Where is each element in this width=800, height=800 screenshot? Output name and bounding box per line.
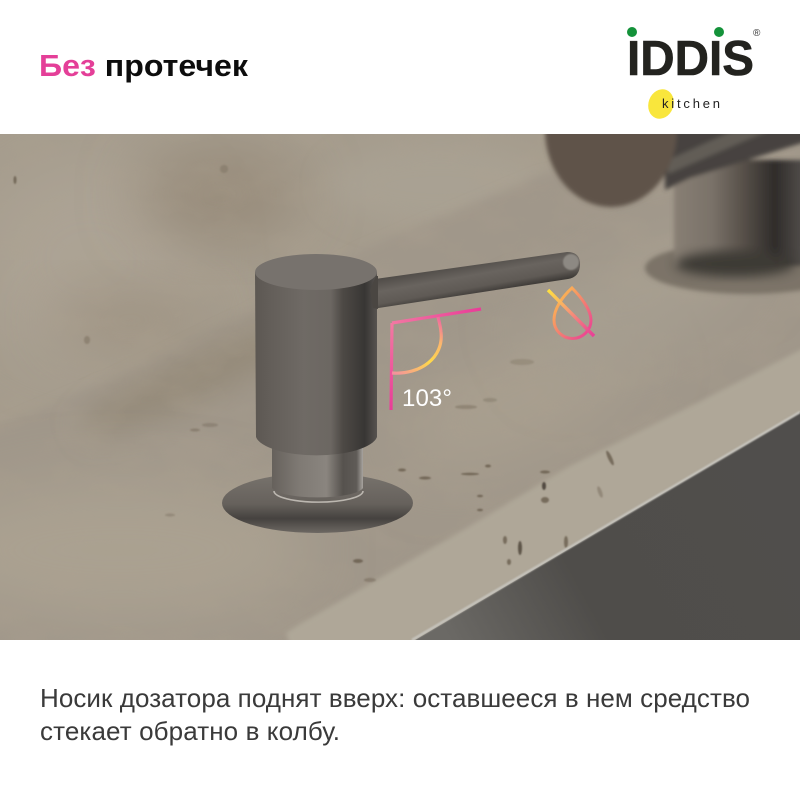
spout [368,252,580,309]
heading: Без протечек [39,48,248,83]
stone mottling [0,134,800,640]
back wall [0,134,559,433]
neck ring [274,491,363,502]
dispenser [222,252,580,533]
sink basin [412,412,800,640]
logo: IDDIS kitchen: ® [753,28,761,39]
body top cap [255,254,377,290]
logo: IDDIS kitchen: IDDIS [627,32,754,86]
stone speckles [14,165,615,582]
countertop front edge [286,340,800,645]
angle value: 103° [402,385,452,412]
background faucet [542,134,800,296]
spout tip [563,254,579,270]
icon: no drip drop [548,288,594,339]
spout joint [374,276,378,309]
logo: IDDIS kitchen [627,27,761,122]
countertop surface [82,184,539,437]
body cylinder [255,272,377,455]
caption: Носик дозатора поднят вверх: оставшееся в нем средство [40,683,750,713]
logo: IDDIS kitchen: kitchen [662,96,720,111]
base plate [222,473,413,533]
photo: soap dispenser on travertine countertop [0,134,800,640]
caption: стекает обратно в колбу. [40,716,340,746]
neck [272,445,363,497]
angle diagram [391,309,481,410]
